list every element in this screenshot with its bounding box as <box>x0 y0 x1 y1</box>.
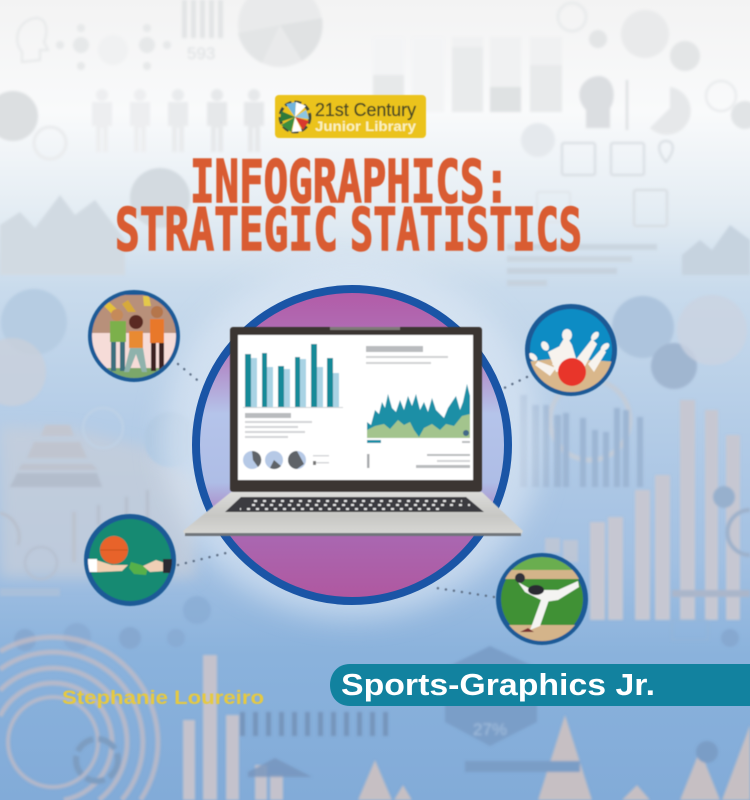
faded circles, left <box>0 289 195 467</box>
left fan <box>104 301 126 371</box>
hand giving ball <box>88 560 128 572</box>
faded monitors and pin <box>537 141 673 226</box>
series banner <box>330 664 750 706</box>
logo text: 21st Century <box>315 100 416 120</box>
circle icon: crowd cheering <box>90 292 180 382</box>
circle icon: basketball handover <box>86 516 174 604</box>
dotted connector lines <box>178 364 527 597</box>
faded striped bars and 593 figure <box>182 0 223 63</box>
publisher logo <box>275 95 426 138</box>
circle icon: baseball pitcher <box>498 556 588 645</box>
faded column chart <box>373 37 562 112</box>
pitcher <box>515 573 579 632</box>
laptop <box>183 327 523 536</box>
title line 2 <box>115 195 582 264</box>
bowling ball <box>558 358 586 386</box>
faded circles row <box>14 596 739 651</box>
faded people row <box>92 89 264 152</box>
author name: Stephanie Loureiro <box>62 688 264 709</box>
central purple disc with blue ring <box>196 289 508 601</box>
title line 2: STATISTICS <box>350 195 582 264</box>
title line 1: INFOGRAPHICS: <box>190 147 509 216</box>
faded pyramid <box>10 425 102 487</box>
faded pie chart <box>238 0 323 67</box>
faded peach triangles <box>358 715 750 800</box>
title <box>115 147 582 264</box>
faded head and dot network <box>17 18 171 70</box>
laptop base <box>183 492 523 535</box>
screen bar chart <box>243 344 343 408</box>
circle icon: bowling strike <box>525 306 618 395</box>
series name: Sports-Graphics Jr. <box>341 667 655 702</box>
publisher logo: Junior Library <box>315 118 416 134</box>
faded grey circles <box>0 3 750 228</box>
money <box>129 562 148 575</box>
faded concentric rings <box>0 637 158 800</box>
screen text lines left <box>245 413 312 438</box>
icon: flower logo <box>280 102 310 132</box>
basketball <box>100 536 128 564</box>
faded circles and bars, right <box>520 295 750 640</box>
faded pictogram row <box>240 712 388 777</box>
laptop screen <box>238 335 473 480</box>
bowling pins <box>527 329 611 376</box>
hand giving money <box>143 560 165 572</box>
title line 2: STRATEGIC <box>115 195 338 264</box>
faded area charts <box>0 195 750 286</box>
faded bottom bars <box>183 655 283 800</box>
faded hexagon 27%: 27% <box>473 720 507 739</box>
faded hexagon 27% <box>445 646 537 746</box>
middle fan <box>122 300 147 372</box>
faded bars and rings, left lower <box>0 490 149 596</box>
laptop screen frame <box>230 327 482 492</box>
screen footer lines <box>367 440 470 468</box>
soft peach wash, left <box>0 426 196 578</box>
right fan <box>143 296 164 371</box>
screen heading right <box>366 346 448 364</box>
faded striped bars and 593 figure: 593 <box>187 44 215 63</box>
white glow behind laptop <box>162 262 542 618</box>
screen pie charts <box>243 451 329 469</box>
screen area chart <box>367 384 470 438</box>
keyboard <box>225 497 484 512</box>
